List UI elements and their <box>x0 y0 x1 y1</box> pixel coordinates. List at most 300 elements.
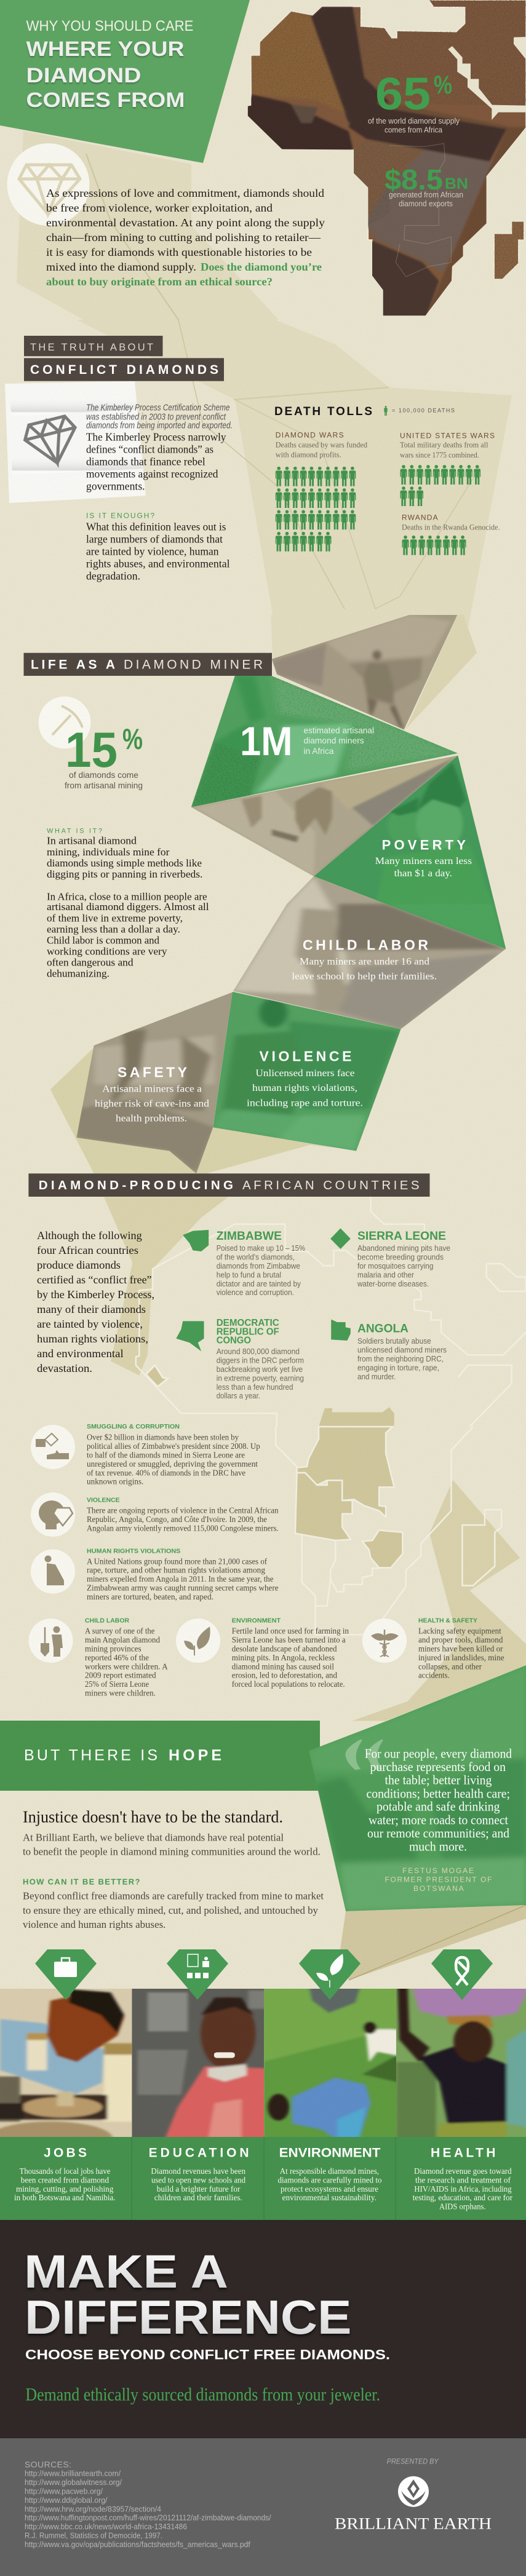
stat: 65 percent: 65 <box>375 68 431 119</box>
section heading: the truth about conflict diamonds <box>24 336 224 381</box>
issue: child labor: main Angolan diamond <box>85 1636 160 1645</box>
Kimberley definition <box>86 431 226 493</box>
text block: what is it: In artisanal diamond <box>47 835 137 847</box>
photo: smiling schoolgirl <box>132 1989 268 2140</box>
map of Africa <box>246 0 526 318</box>
panel: environment <box>261 1986 399 2220</box>
headline: MAKE A <box>24 2246 228 2298</box>
country: Zimbabwe: Poised to make up 10 – 15% <box>217 1243 305 1253</box>
issue: child labor <box>29 1617 169 1698</box>
text block: how can it be better: Beyond conflict free diamonds are carefully tracked from mine to market <box>23 1890 324 1902</box>
photo: child labor <box>233 876 506 1029</box>
card: health text: Diamond revenue goes toward <box>414 2167 512 2176</box>
main title <box>26 38 185 112</box>
country: Zimbabwe: violence and corruption. <box>217 1288 294 1297</box>
country: Sierra Leone: malaria and other <box>357 1270 415 1279</box>
text block: how can it be better <box>23 1877 324 1930</box>
text block: what is it: mining, individuals mine for <box>47 846 170 858</box>
text block: how can it be better: to ensure they are ethically mined, cut, and polished, and untouched by <box>23 1904 318 1916</box>
issue: human rights violations: HUMAN RIGHTS VIOLATIONS <box>87 1548 180 1555</box>
country: Democratic Republic of Congo <box>176 1318 304 1400</box>
issue: health and safety: injured in landslides, mine <box>418 1654 504 1663</box>
sources list: R.J. Rummel, Statistics of Democide, 1997. <box>25 2531 162 2540</box>
card: education text: Diamond revenues have been <box>151 2167 245 2176</box>
card: environment text: protect ecosystems and ensure <box>281 2185 378 2194</box>
intro paragraph: four African countries: certified as “conflict free” <box>37 1274 152 1286</box>
card: environment text: ENVIRONMENT <box>279 2146 381 2160</box>
country: Sierra Leone: water-borne diseases. <box>357 1279 429 1288</box>
text block: what is it: dehumanizing. <box>47 968 110 980</box>
country: Sierra Leone <box>330 1228 450 1288</box>
intro paragraph: four African countries: human rights violations, <box>37 1333 148 1345</box>
stat: 15 percent artisanal: % <box>122 723 143 755</box>
country: Democratic Republic of Congo: Around 800,000 diamond <box>217 1347 300 1356</box>
issue: child labor: 2009 report estimated <box>85 1671 156 1681</box>
icon: Angola shape <box>331 1320 351 1341</box>
icon: skull and diamond <box>31 1492 75 1537</box>
callout: child labor: Many miners are under 16 and <box>300 956 429 967</box>
issue: violence: VIOLENCE <box>87 1497 120 1504</box>
section banner: but there is hope <box>0 1721 320 1791</box>
photo: young man cutting a diamond <box>0 1989 132 2137</box>
callout: violence: VIOLENCE <box>260 1048 352 1064</box>
intro text block: environmental devastation. At any point along the supply <box>46 216 325 229</box>
chart: diamond wars <box>276 431 367 552</box>
country: Angola: from the neighboring DRC, <box>357 1354 444 1363</box>
issue: smuggling and corruption: to half of the diamonds mined in Sierra Leone are <box>87 1451 245 1460</box>
stat: 65 percent <box>368 68 460 134</box>
card: jobs text: JOBS <box>44 2146 87 2160</box>
text block: how can it be better: violence and human rights abuses. <box>23 1919 165 1930</box>
section heading: the truth about conflict diamonds: THE TRUTH ABOUT <box>30 342 153 353</box>
issue: smuggling and corruption: unregistered or smuggled, depriving the government <box>87 1460 258 1469</box>
country: Zimbabwe: dictator and are tainted by <box>217 1279 301 1288</box>
country: Angola <box>331 1320 447 1381</box>
card: education text <box>132 2137 264 2220</box>
card: jobs text: in both Botswana and Namibia. <box>14 2194 116 2203</box>
issue: smuggling and corruption <box>31 1423 260 1487</box>
Kimberley italic note: The Kimberley Process Certification Scheme <box>86 403 230 413</box>
issue: human rights violations: Zimbabwean army was caught running secret camps where <box>87 1584 279 1593</box>
card: jobs text <box>0 2137 132 2220</box>
issue: smuggling and corruption: political allies of Zimbabwe's president since 2008. Up <box>87 1442 260 1451</box>
callout: safety <box>95 1064 209 1124</box>
panel: Festus Mogae quote <box>309 1665 526 1980</box>
card: education text: EDUCATION <box>149 2146 249 2160</box>
card: health text: HEALTH <box>431 2146 495 2160</box>
text block: how can it be better: HOW CAN IT BE BETTER? <box>23 1877 140 1887</box>
photo: panning the riverbed <box>191 755 458 876</box>
issue: health and safety: Lacking safety equipment <box>418 1627 501 1636</box>
sources list: http://www.globalwitness.org/ <box>25 2478 122 2487</box>
intro paragraph: four African countries: produce diamonds <box>37 1259 121 1271</box>
icon: smuggling hands <box>31 1425 75 1469</box>
text block: what is it: Child labor is common and <box>47 934 160 946</box>
callout: child labor <box>292 937 437 981</box>
card: environment text: environmental sustainability. <box>282 2194 377 2203</box>
country: Angola: ANGOLA <box>357 1323 408 1336</box>
callout: safety: Artisanal miners face a <box>102 1084 202 1095</box>
stat: 8.5 billion: generated from African <box>389 190 463 199</box>
issue: health and safety: accidents. <box>418 1671 450 1681</box>
text block: what is it: of them live in extreme poverty, <box>47 912 183 924</box>
text block: is it enough <box>86 512 230 582</box>
section heading: diamond-producing African countries: DIAMOND-PRODUCING <box>39 1178 233 1192</box>
Kimberley definition: defines “conflict diamonds” as <box>86 443 213 456</box>
text block: injustice statement: to benefit the people in diamond mining communities around the world. <box>23 1846 321 1858</box>
intro paragraph: four African countries: by the Kimberley Process, <box>37 1288 154 1301</box>
headline <box>24 2246 352 2344</box>
photo: safety shovel miners <box>50 992 356 1173</box>
country: Zimbabwe <box>183 1230 305 1297</box>
issue: human rights violations: miners expelled from Angola in 2011. In the same year, the <box>87 1575 273 1584</box>
panel: education <box>132 1989 268 2220</box>
issue: child labor: reported 46% of the <box>85 1654 149 1663</box>
Kimberley definition: The Kimberley Process narrowly <box>86 431 226 443</box>
callout: child labor: CHILD LABOR <box>303 937 428 953</box>
stat: 1M artisanal miners: diamond miners <box>304 735 364 745</box>
issue: health and safety <box>362 1617 504 1681</box>
callout: safety: higher risk of cave-ins and <box>95 1098 209 1109</box>
quote attribution: FESTUS MOGAE <box>402 1866 474 1875</box>
card: jobs text: been created from diamond <box>21 2176 109 2185</box>
presented by logo: BRILLIANT EARTH <box>335 2515 492 2532</box>
panel: footer <box>0 2438 526 2576</box>
quote text: the table; better living <box>385 1773 492 1788</box>
text block: what is it: WHAT IS IT? <box>47 827 102 834</box>
stat: 15 percent artisanal: 15 <box>65 723 118 778</box>
Kimberley italic note <box>86 403 233 431</box>
icon: pickaxe <box>38 696 91 749</box>
green demand line: Demand ethically sourced diamonds from your jeweler. <box>25 2384 380 2404</box>
panel: jobs <box>0 1989 134 2220</box>
sources list: http://www.ddiglobal.org/ <box>25 2496 108 2505</box>
section heading: life as a diamond miner: DIAMOND MINER <box>124 658 263 672</box>
panel: health <box>396 1986 526 2220</box>
callout: child labor: leave school to help their families. <box>292 971 437 981</box>
sources list <box>25 2459 271 2549</box>
quote text: much more. <box>409 1839 467 1854</box>
text block: what is it: digging pits or panning in riverbeds. <box>47 868 202 880</box>
issue: environment: erosion, led to deforestation, and <box>232 1671 337 1681</box>
issue: violence <box>31 1492 279 1537</box>
icon: Brilliant Earth emblem <box>398 2476 429 2507</box>
country: Democratic Republic of Congo: CONGO <box>217 1335 251 1345</box>
heading: death tolls: DEATH TOLLS <box>274 405 372 418</box>
country: Sierra Leone: for mosquitoes carrying <box>357 1261 433 1270</box>
green title polygon <box>0 0 250 163</box>
sources list: http://www.pacweb.org/ <box>25 2487 103 2495</box>
stat: 65 percent: % <box>434 70 452 99</box>
quote attribution: FORMER PRESIDENT OF <box>385 1875 492 1884</box>
sources list: http://www.va.gov/opa/publications/factsheets/fs_americas_wars.pdf <box>25 2540 250 2549</box>
section banner: but there is hope: BUT THERE IS <box>24 1746 157 1764</box>
intro text block: As expressions of love and commitment, diamonds should <box>46 187 324 199</box>
card: education text: children and their families. <box>154 2194 242 2203</box>
country: Democratic Republic of Congo: diggers in the DRC perform <box>217 1355 304 1365</box>
issue: environment: ENVIRONMENT <box>232 1617 281 1624</box>
section heading: life as a diamond miner: LIFE AS A <box>31 658 115 672</box>
issue: environment: Fertile land once used for farming in <box>232 1627 349 1636</box>
issue: health and safety: HEALTH & SAFETY <box>418 1617 477 1624</box>
quote attribution: BOTSWANA <box>413 1884 464 1893</box>
intro text block: about to buy originate from an ethical source? <box>46 275 273 288</box>
text block: injustice statement: At Brilliant Earth, we believe that diamonds have real potential <box>23 1831 284 1843</box>
section heading: diamond-producing African countries <box>28 1173 429 1197</box>
card: health text <box>396 2137 526 2220</box>
country: Sierra Leone: Abandoned mining pits have <box>357 1243 450 1253</box>
chart: diamond wars: Deaths caused by wars funded <box>276 440 367 449</box>
photo: community members in green <box>309 1665 526 1980</box>
stat: 1M artisanal miners: in Africa <box>304 746 334 756</box>
issue: child labor: CHILD LABOR <box>85 1617 129 1624</box>
issue: human rights violations: miners are tortured, beaten, and raped. <box>87 1593 213 1602</box>
issue: child labor: mining provinces <box>85 1644 141 1654</box>
country: Democratic Republic of Congo: REPUBLIC OF <box>217 1326 279 1337</box>
text block: is it enough: rights abuses, and environmental <box>86 557 230 569</box>
issue: smuggling and corruption: SMUGGLING & CORRUPTION <box>87 1423 180 1430</box>
country: Democratic Republic of Congo: less than a few hundred <box>217 1382 293 1392</box>
subhead: CHOOSE BEYOND CONFLICT FREE DIAMONDS. <box>25 2347 390 2363</box>
headline: DIFFERENCE <box>25 2290 352 2344</box>
text block: injustice statement <box>23 1807 321 1858</box>
icon: teacher and students hexagon <box>167 1949 228 2000</box>
section banner: but there is hope: HOPE <box>169 1746 221 1764</box>
country: Sierra Leone: become breeding grounds <box>357 1252 444 1261</box>
callout: safety: SAFETY <box>118 1064 187 1080</box>
Kimberley italic note: was established in 2003 to prevent conflict <box>86 412 226 422</box>
country: Angola: engaging in torture, rape, <box>357 1363 439 1372</box>
callout: poverty <box>375 838 472 879</box>
country: Angola: and murder. <box>357 1372 396 1381</box>
quote text: potable and safe drinking <box>377 1799 500 1814</box>
intro text block: Does the diamond you’re <box>201 261 322 273</box>
icon: awareness ribbon hexagon <box>431 1949 493 2000</box>
intro text block: mixed into the diamond supply. <box>46 261 196 273</box>
quote text: conditions; better health care; <box>367 1786 510 1801</box>
chart: diamond wars: DIAMOND WARS <box>276 431 344 440</box>
intro text block: chain—from mining to cutting and polishing to retailer— <box>46 231 321 244</box>
main title: DIAMOND <box>26 64 141 87</box>
card: jobs text: Thousands of local jobs have <box>20 2167 110 2176</box>
stat: 8.5 billion: diamond exports <box>399 199 453 208</box>
stat: 8.5 billion <box>385 164 468 208</box>
stat: 1M artisanal miners: estimated artisanal <box>304 726 374 735</box>
icon: briefcase hexagon <box>35 1949 97 2000</box>
chart: United States wars: wars since 1775 combined. <box>400 450 479 459</box>
issue: human rights violations: rape, torture, and other human rights violations among <box>87 1566 265 1575</box>
intro text block: it is easy for diamonds with questionable histories to be <box>46 246 312 258</box>
sources list: http://www.brilliantearth.com/ <box>25 2470 121 2478</box>
country: Zimbabwe: help to fund a brutal <box>217 1270 281 1279</box>
stat: 15 percent artisanal: from artisanal mining <box>65 780 143 790</box>
country: Angola: unlicensed diamond miners <box>357 1345 447 1354</box>
issue: environment <box>176 1617 349 1689</box>
header: title panel <box>0 0 250 163</box>
icon: kneeling figure <box>31 1550 75 1594</box>
legend <box>384 406 455 416</box>
issue: child labor: workers were children. A <box>85 1662 169 1671</box>
country: Sierra Leone: SIERRA LEONE <box>357 1230 446 1243</box>
intro paragraph: four African countries: many of their diamonds <box>37 1303 146 1315</box>
chart: Rwanda: Deaths in the Rwanda Genocide. <box>402 523 500 532</box>
section heading: life as a diamond miner <box>23 653 272 676</box>
icon: grey diamond <box>22 414 82 469</box>
country: Zimbabwe: ZIMBABWE <box>217 1230 282 1243</box>
panel: death tolls <box>274 405 500 555</box>
text block: what is it: diamonds using simple methods like <box>47 857 202 869</box>
text block: what is it: In Africa, close to a million people are <box>47 890 207 902</box>
stat: 15 percent artisanal: of diamonds come <box>69 770 138 780</box>
callout: violence <box>247 1048 363 1108</box>
chart: Rwanda <box>402 513 500 555</box>
issue: child labor: 25% of Sierra Leone <box>85 1680 149 1689</box>
text block: is it enough: large numbers of diamonds that <box>86 533 223 545</box>
folded paper <box>5 381 146 503</box>
intro paragraph: four African countries: devastation. <box>37 1362 92 1374</box>
panel: make a difference call to action <box>0 2220 526 2438</box>
intro paragraph: four African countries: and environmental <box>37 1347 124 1360</box>
text block: injustice statement: Injustice doesn't have to be the standard. <box>23 1807 283 1826</box>
card: health text: HIV/AIDS in Africa, including <box>414 2185 512 2194</box>
issue: human rights violations <box>31 1548 279 1602</box>
intro text block <box>46 187 325 288</box>
quote text: our remote communities; and <box>367 1826 509 1841</box>
text block: is it enough: What this definition leaves out is <box>86 520 226 533</box>
country: Zimbabwe: diamonds from Zimbabwe <box>217 1261 300 1270</box>
country: Democratic Republic of Congo: DEMOCRATIC <box>217 1318 279 1328</box>
text block: is it enough: degradation. <box>86 569 140 582</box>
icon: Sierra Leone shape <box>330 1228 351 1249</box>
presented by logo <box>335 2457 492 2532</box>
issue: smuggling and corruption: of tax revenue. 40% of diamonds in the DRC have <box>87 1468 245 1478</box>
sources list: http://www.huffingtonpost.com/huff-wires/20121112/af-zimbabwe-diamonds/ <box>25 2514 271 2522</box>
country: Democratic Republic of Congo: backbreaking work yet live <box>217 1365 303 1374</box>
issue: environment: forced local populations to relocate. <box>232 1680 345 1689</box>
issue: violence: Republic, Angola, Congo, and Côte d'Ivoire. In 2009, the <box>87 1515 267 1524</box>
quote text: water; more roads to connect <box>369 1812 508 1827</box>
photo: woman carrying a basin <box>396 1986 526 2140</box>
text block: what is it: artisanal diamond diggers. Almost all <box>47 901 209 913</box>
callout: violence: Unlicensed miners face <box>256 1068 354 1079</box>
map of Madagascar <box>494 221 524 279</box>
presented by logo: PRESENTED BY <box>387 2457 439 2466</box>
main title: COMES FROM <box>26 89 185 112</box>
issue: environment: diamond mining has caused soil <box>232 1662 334 1671</box>
main title: WHERE YOUR <box>26 38 185 61</box>
icon: caduceus <box>362 1619 407 1663</box>
icon: DRC shape <box>176 1321 204 1351</box>
Kimberley definition: movements against recognized <box>86 468 218 480</box>
eyebrow heading: WHY YOU SHOULD CARE <box>26 18 193 34</box>
quote text <box>365 1746 512 1854</box>
chart: Rwanda: RWANDA <box>402 513 438 522</box>
issue: environment: Sierra Leone has been turned into a <box>232 1636 346 1645</box>
icon: child with shovel <box>29 1619 73 1663</box>
intro text block: be free from violence, worker exploitation, and <box>46 202 273 214</box>
callout: violence: including rape and torture. <box>247 1098 363 1108</box>
Kimberley definition: diamonds that finance rebel <box>86 456 205 468</box>
quote text: For our people, every diamond <box>365 1746 512 1761</box>
stat: 65 percent: comes from Africa <box>385 125 443 134</box>
chart: United States wars: Total military deaths from all <box>400 440 488 450</box>
intro paragraph: four African countries: four African countries <box>37 1244 138 1256</box>
intro paragraph: four African countries: are tainted by violence, <box>37 1318 143 1330</box>
Kimberley italic note: diamonds from being imported and exported. <box>86 421 233 431</box>
photo: farmers in a green field <box>261 1986 399 2140</box>
map: outline of Africa behind the country facts <box>104 1197 526 1721</box>
card: education text: build a brighter future for <box>157 2185 241 2194</box>
text block: is it enough: are tainted by violence, human <box>86 545 219 557</box>
icon: diamond in circle <box>7 143 90 226</box>
icon: leaf hexagon <box>299 1949 361 2000</box>
text block: what is it: often dangerous and <box>47 957 133 969</box>
intro paragraph: four African countries: Although the following <box>37 1229 142 1242</box>
stat: 8.5 billion: BN <box>445 175 468 192</box>
card: environment text <box>264 2137 396 2220</box>
issue: smuggling and corruption: unknown origins. <box>87 1478 143 1487</box>
section heading: diamond-producing African countries: AFRICAN COUNTRIES <box>242 1178 420 1192</box>
callout: poverty: Many miners earn less <box>375 856 472 866</box>
issue: violence: There are ongoing reports of violence in the Central African <box>87 1507 279 1516</box>
text block: is it enough: IS IT ENOUGH? <box>86 512 154 520</box>
photo: green gravel sieve <box>191 676 458 807</box>
sources list: http://www.hrw.org/node/83957/section/4 <box>25 2505 161 2513</box>
photo: miner digging <box>271 615 477 730</box>
photo: children, poverty <box>314 755 506 949</box>
text block: what is it <box>47 827 209 980</box>
card: health text: the research and treatment of <box>415 2176 511 2185</box>
panel: Kimberley Process white note <box>5 381 233 503</box>
issue: human rights violations: A United Nations group found more than 21,000 cases of <box>87 1557 267 1566</box>
issue: environment: desolate landscape of abandoned <box>232 1644 337 1654</box>
card: environment text: diamonds are carefully mined to <box>278 2176 381 2185</box>
issue: health and safety: and proper tools, diamond <box>418 1636 503 1645</box>
country: Angola: Soldiers brutally abuse <box>357 1336 431 1345</box>
stat: 15 percent artisanal <box>38 696 143 790</box>
sources list: http://www.bbc.co.uk/news/world-africa-13431486 <box>25 2522 187 2531</box>
issue: violence: Angolan army violently removed 115,000 Congolese miners. <box>87 1524 279 1534</box>
legend: = 100,000 DEATHS <box>392 408 455 414</box>
country: Zimbabwe: of the world's diamonds, <box>217 1252 295 1261</box>
photo: armed men, violence <box>213 992 401 1151</box>
chart: diamond wars: with diamond profits. <box>276 450 341 459</box>
sources list: SOURCES: <box>25 2459 71 2469</box>
stat: 1M artisanal miners: 1M <box>240 718 293 764</box>
text block: what is it: working conditions are very <box>47 946 167 957</box>
quote attribution <box>385 1866 492 1893</box>
card: education text: used to open new schools and <box>151 2176 245 2185</box>
stat: 8.5 billion: $8.5 <box>385 164 443 196</box>
icon: quotation mark <box>345 1739 383 1770</box>
issue: child labor: A survey of one of the <box>85 1627 154 1636</box>
callout: poverty: than $1 a day. <box>394 868 452 879</box>
callout: safety: health problems. <box>116 1113 187 1124</box>
callout: violence: human rights violations, <box>252 1083 357 1093</box>
card: health text: testing, education, and care for <box>413 2194 512 2203</box>
country: Democratic Republic of Congo: in extreme poverty, earning <box>217 1373 304 1382</box>
issue: health and safety: collapses, and other <box>418 1662 482 1671</box>
issue: child labor: miners were children. <box>85 1689 156 1698</box>
chart: United States wars <box>400 431 495 506</box>
card: health text: AIDS orphans. <box>439 2203 486 2212</box>
issue: environment: mining pits. In Angola, reckless <box>232 1654 335 1663</box>
icon: Zimbabwe shape <box>183 1230 209 1251</box>
callout: poverty: POVERTY <box>382 838 466 853</box>
text block: what is it: earning less than a dollar a day. <box>47 924 180 935</box>
intro paragraph: four African countries <box>37 1229 154 1374</box>
panel: Africa map with supply statistics <box>246 0 526 318</box>
